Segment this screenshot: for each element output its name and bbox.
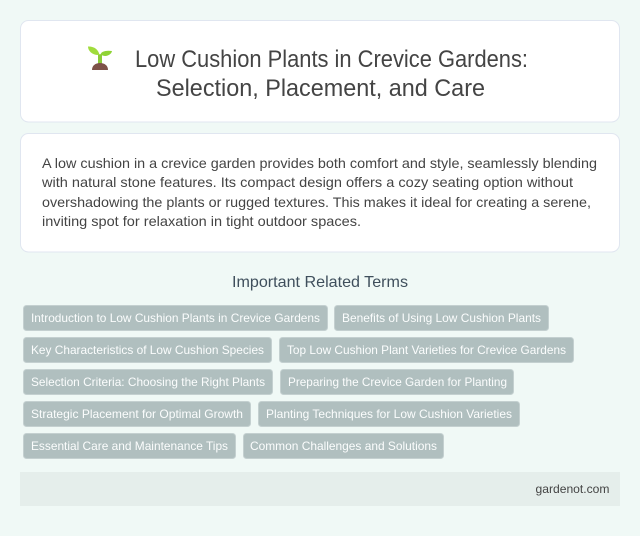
heading: Low Cushion Plants in Crevice Gardens: [135, 46, 528, 73]
text block: description: with natural stone features. Its compact design offers a cozy seating option without [41, 174, 573, 190]
tag: Benefits of Using Low Cushion Plants [342, 311, 541, 325]
heading: Selection, Placement, and Care [156, 75, 485, 102]
tag [24, 434, 236, 458]
icon: sprout [88, 46, 112, 70]
tag: Strategic Placement for Optimal Growth [31, 407, 243, 421]
tag: Common Challenges and Solutions [250, 439, 437, 453]
panel: title card [20, 20, 620, 122]
tag [258, 402, 520, 426]
tag [280, 370, 514, 394]
tag [244, 434, 444, 458]
tag [24, 306, 328, 330]
tag: Key Characteristics of Low Cushion Species [31, 343, 264, 357]
footer text: gardenot.com [536, 482, 610, 496]
tag [24, 338, 272, 362]
tag [334, 306, 548, 330]
tag list [24, 306, 574, 458]
tag: Top Low Cushion Plant Varieties for Crevice Gardens [287, 343, 566, 357]
heading: related terms: Important Related Terms [232, 274, 408, 291]
heading [135, 46, 528, 102]
text block: description [41, 155, 597, 229]
text block: description: A low cushion in a crevice garden provides both comfort and style, seamlessly blending [42, 155, 597, 171]
footer bar [20, 472, 620, 506]
tag: Planting Techniques for Low Cushion Varieties [266, 407, 512, 421]
tag [24, 370, 272, 394]
text block: description: inviting spot for relaxation in tight outdoor spaces. [42, 213, 361, 229]
tag: Essential Care and Maintenance Tips [31, 439, 228, 453]
tag: Introduction to Low Cushion Plants in Crevice Gardens [31, 311, 320, 325]
tag [280, 338, 574, 362]
tag: Preparing the Crevice Garden for Planting [288, 375, 507, 389]
panel: description card [20, 134, 620, 252]
tag: Selection Criteria: Choosing the Right Plants [31, 375, 265, 389]
text block: description: overshadowing the plants or rugged textures. This makes it ideal for creating a serene, [42, 194, 591, 210]
tag [24, 402, 250, 426]
